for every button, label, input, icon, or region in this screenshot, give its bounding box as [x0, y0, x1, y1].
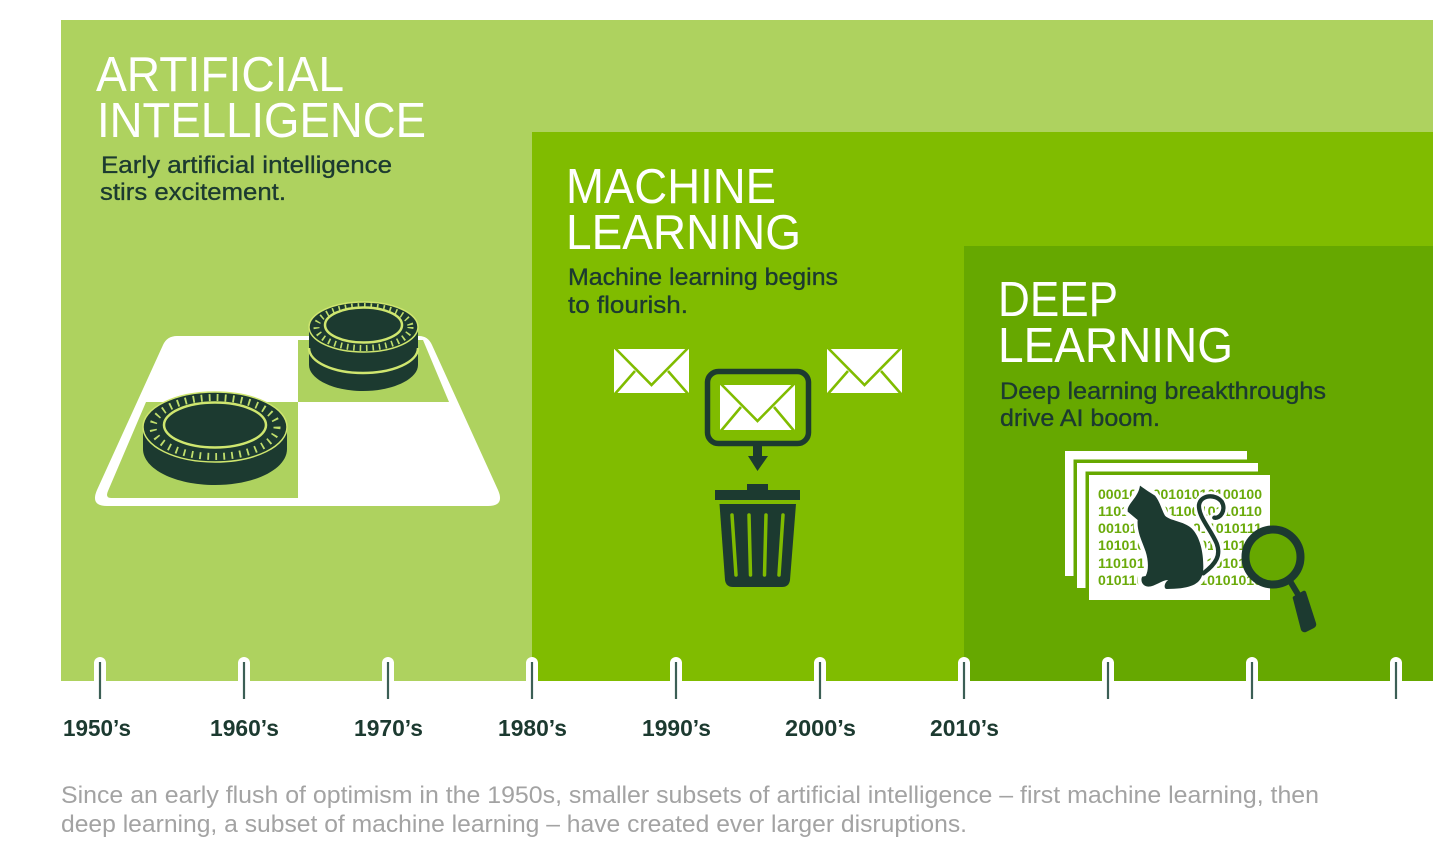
icon: stacked pages with cat and magnifier: 010110100101010101010: [1098, 573, 1262, 588]
heading: artificial intelligence: [96, 48, 426, 148]
year labels: 2000’s: [785, 715, 856, 741]
icon: stacked pages with cat and magnifier: [1065, 451, 1316, 632]
tick marks: [94, 657, 1402, 699]
text: deep learning breakthroughs: [1000, 378, 1326, 432]
panel: artificial intelligence: [61, 20, 1433, 681]
caption: [61, 782, 1319, 838]
text: machine learning begins: [568, 264, 838, 319]
text: deep learning breakthroughs: drive AI boom.: [1000, 405, 1160, 432]
year labels: 1990’s: [642, 715, 711, 741]
panel: deep learning: [964, 246, 1433, 681]
heading: deep learning: DEEP: [998, 273, 1118, 327]
heading: deep learning: [998, 273, 1233, 373]
heading: machine learning: MACHINE: [566, 160, 776, 214]
heading: machine learning: LEARNING: [566, 206, 801, 260]
caption: Since an early flush of optimism in the 1950s, smaller subsets of artificial intelligence – first machine learning, then: [61, 782, 1319, 809]
text: early artificial intelligence: [100, 152, 392, 206]
icon: stacked pages with cat and magnifier: 101010110101001010100: [1098, 538, 1262, 553]
timeline: [63, 657, 1402, 741]
heading: artificial intelligence: ARTIFICIAL: [96, 48, 344, 102]
icon: stacked pages with cat and magnifier: 110101101001011010100: [1098, 556, 1262, 571]
text: machine learning begins: to flourish.: [568, 292, 688, 319]
icon: left envelope: [614, 347, 689, 395]
icon: trash can: [715, 484, 800, 587]
icon: stacked pages with cat and magnifier: 001011010010011010111: [1098, 521, 1263, 536]
icon: stacked pages with cat and magnifier: 110100110110010110110: [1098, 504, 1262, 519]
caption: deep learning, a subset of machine learning – have created ever larger disruptions.: [61, 811, 967, 838]
heading: machine learning: [566, 160, 801, 260]
icon: framed envelope with arrow: [708, 372, 808, 471]
year labels: 1980’s: [498, 715, 567, 741]
text: early artificial intelligence: stirs excitement.: [100, 179, 286, 206]
icon: stacked pages with cat and magnifier: 000100100101010100100: [1098, 487, 1262, 502]
icon: checkerboard with checkers: [95, 302, 500, 506]
heading: deep learning: LEARNING: [998, 319, 1233, 373]
text: machine learning begins: Machine learning begins: [568, 264, 838, 291]
year labels: [63, 715, 999, 741]
text: early artificial intelligence: Early artificial intelligence: [101, 152, 392, 179]
icon: right envelope: [827, 347, 902, 395]
year labels: 1960’s: [210, 715, 279, 741]
year labels: 2010’s: [930, 715, 999, 741]
heading: artificial intelligence: INTELLIGENCE: [97, 94, 426, 148]
panel: machine learning: [532, 132, 1433, 681]
year labels: 1970’s: [354, 715, 423, 741]
year labels: 1950’s: [63, 715, 131, 741]
text: deep learning breakthroughs: Deep learning breakthroughs: [1000, 378, 1326, 405]
